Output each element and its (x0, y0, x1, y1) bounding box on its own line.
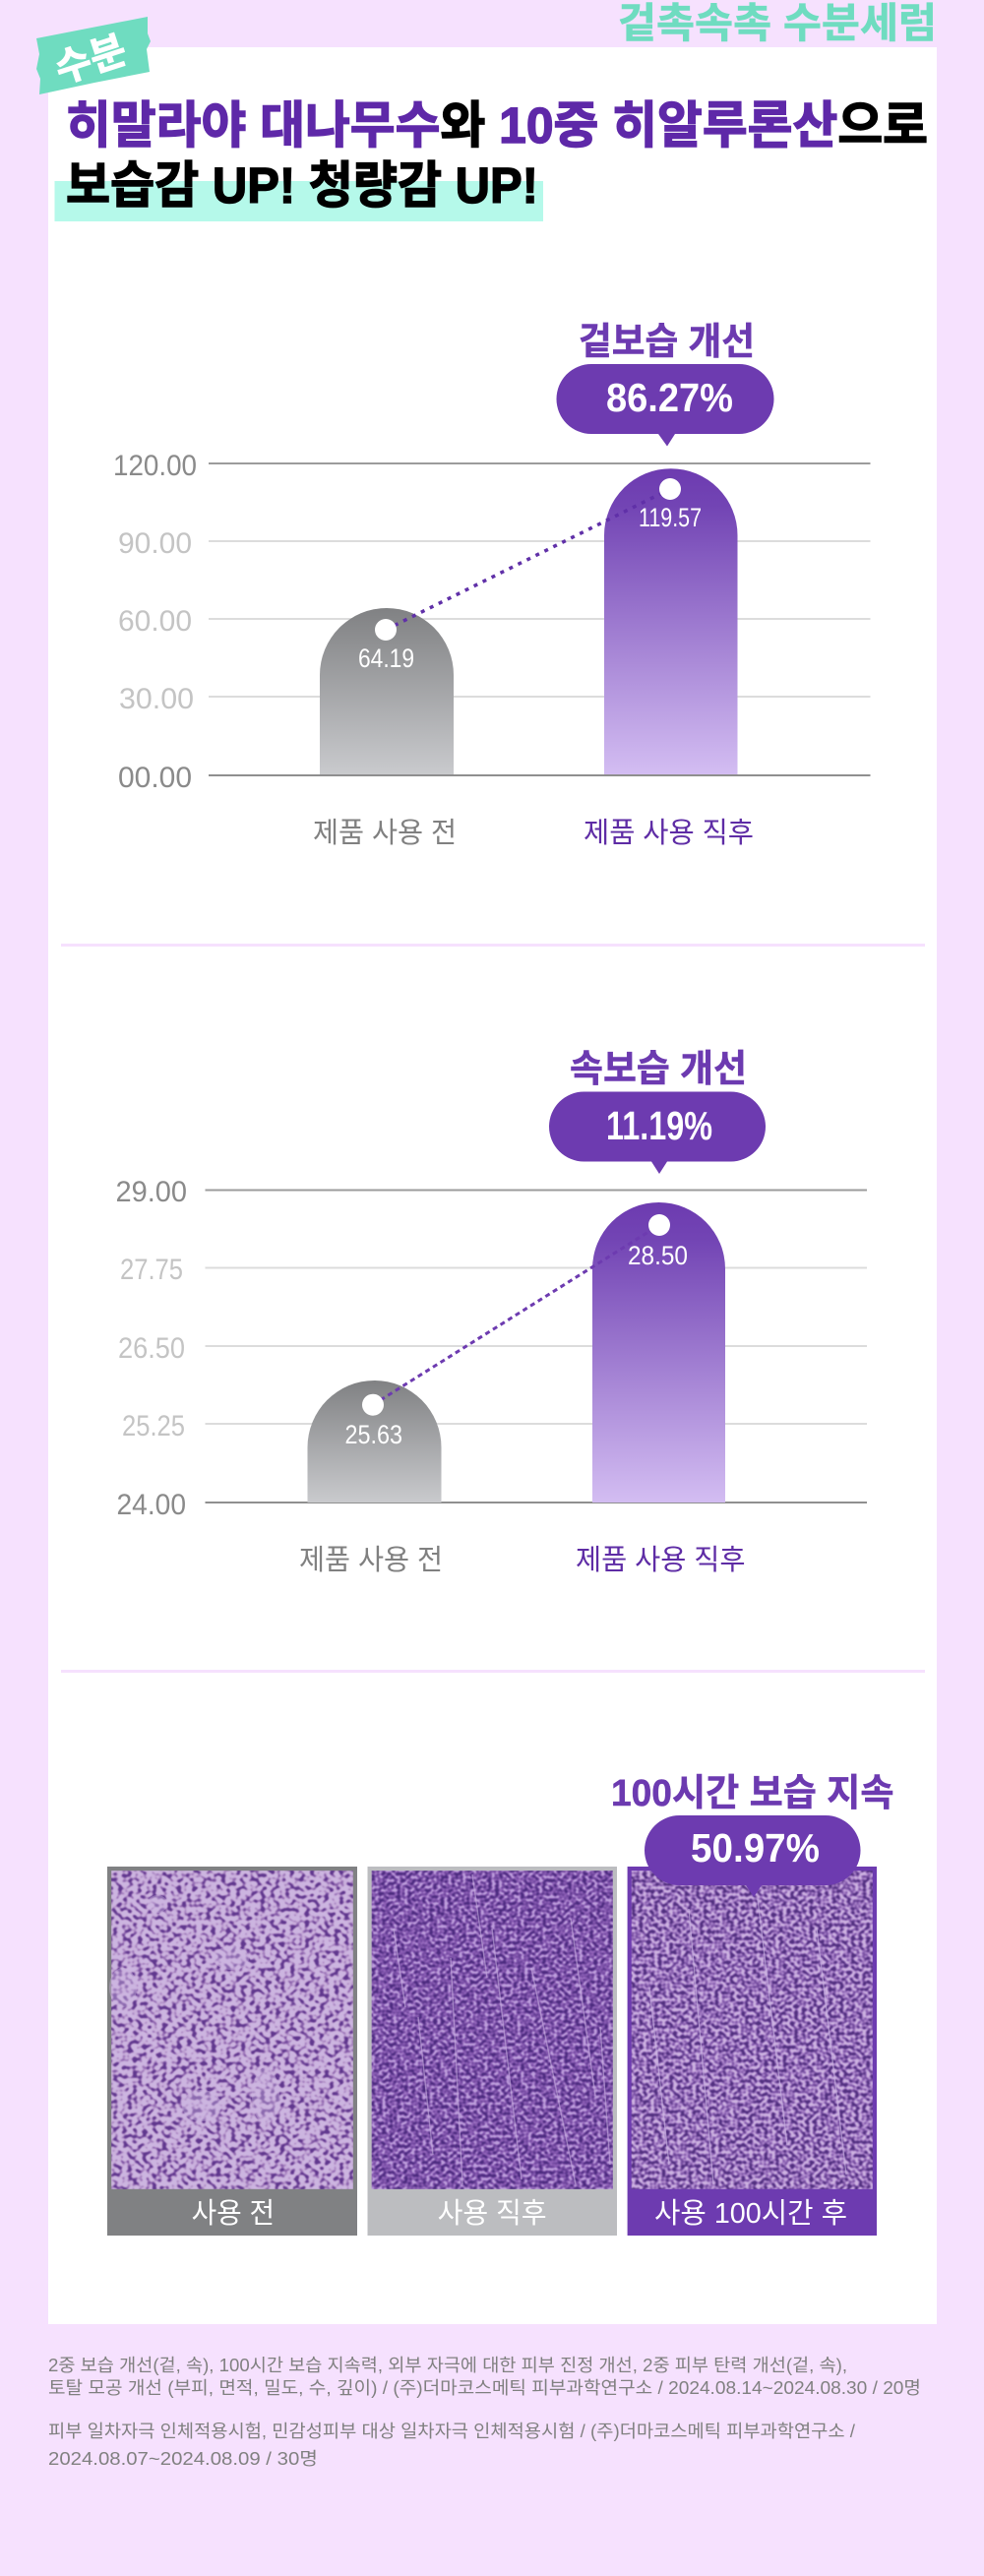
bar: after use (592, 1202, 725, 1503)
heading line 1: 히말라야 대나무수와 10중 히알루론산으로 (66, 97, 928, 153)
chart 2 y axis labels: 29.00 (116, 1176, 187, 1208)
chart 1 y axis labels: 30.00 (119, 683, 194, 715)
chart 1 point after (639, 478, 702, 532)
chart 2 y axis labels: 27.75 (120, 1254, 183, 1286)
top title: 겉촉속촉 수분세럼 (618, 0, 937, 46)
heading highlight (55, 181, 543, 221)
photo: before use (107, 1867, 357, 2236)
footnote 1 (48, 2356, 921, 2398)
photo heading: 100시간 보습 지속 (611, 1773, 893, 1814)
chart 2 category before: 제품 사용 전 (299, 1545, 443, 1576)
photo: right after use: 사용 직후 (438, 2198, 547, 2230)
footnote 2: 2024.08.07~2024.08.09 / 30명 (48, 2449, 318, 2469)
photo: 100 hours after use (628, 1867, 877, 2236)
chart 1 point after: 119.57 (639, 503, 702, 532)
chart 1 category after: 제품 사용 직후 (584, 818, 754, 849)
chart 2 heading: 속보습 개선 (570, 1049, 747, 1090)
chart 1 point before: 64.19 (358, 644, 414, 673)
chart: outer moisture improvement (113, 322, 870, 849)
white content panel (48, 47, 937, 2324)
chart 2 callout: 11.19% (606, 1103, 712, 1148)
photo callout (645, 1815, 860, 1897)
chart: inner moisture improvement (116, 1049, 867, 1576)
chart 1 category before: 제품 사용 전 (313, 818, 457, 849)
footnotes (48, 2356, 921, 2469)
chart 2 point after (628, 1214, 688, 1270)
chart 1 y axis labels (113, 450, 197, 794)
chart 1 y axis labels: 120.00 (113, 450, 197, 482)
chart 1 callout (557, 364, 773, 447)
tag: moisture (36, 17, 151, 94)
main heading (55, 97, 928, 221)
chart 2 point before (344, 1394, 402, 1449)
chart 2 y axis labels: 24.00 (116, 1489, 186, 1521)
chart 2 y axis labels: 25.25 (122, 1410, 185, 1442)
footnote 2 (48, 2422, 855, 2469)
chart 2 point before: 25.63 (344, 1420, 402, 1449)
chart 2 point after: 28.50 (628, 1241, 688, 1270)
chart 1 dotted trend line (386, 489, 670, 630)
bar: after use (604, 468, 738, 774)
chart 1 y axis labels: 90.00 (118, 527, 192, 560)
chart 2 dotted trend line (373, 1225, 659, 1405)
chart 1 callout: 86.27% (606, 375, 733, 420)
chart 1 y axis labels: 00.00 (118, 762, 192, 794)
chart 2 category after: 제품 사용 직후 (576, 1545, 746, 1576)
photo callout: 50.97% (691, 1825, 820, 1871)
photo: before use: 사용 전 (192, 2198, 275, 2230)
footnote 1: 토탈 모공 개선 (부피, 면적, 밀도, 수, 깊이) / (주)더마코스메틱 피부과학연구소 / 2024.08.14~2024.08.30 / 20명 (48, 2378, 921, 2398)
chart 1 point before (358, 619, 414, 673)
photo: 100 hours after use: 사용 100시간 후 (654, 2198, 847, 2230)
tag shape (36, 17, 151, 94)
chart 2 y axis labels (116, 1176, 187, 1521)
tag text: 수분 (50, 29, 132, 92)
bar: before use (320, 608, 454, 774)
heading line 2: 보습감 UP! 청량감 UP! (66, 157, 538, 214)
chart 1 y axis labels: 60.00 (118, 605, 192, 638)
bar: before use (307, 1380, 441, 1503)
footnote 2: 피부 일차자극 인체적용시험, 민감성피부 대상 일차자극 인체적용시험 / (주)더마코스메틱 피부과학연구소 / (48, 2422, 855, 2441)
panel: skin photo comparison (107, 1773, 893, 2236)
chart 1 heading: 겉보습 개선 (579, 322, 755, 363)
chart 2 callout (549, 1092, 766, 1174)
footnote 1: 2중 보습 개선(겉, 속), 100시간 보습 지속력, 외부 자극에 대한 피부 진정 개선, 2중 피부 탄력 개선(겉, 속), (48, 2356, 847, 2375)
photo: right after use (368, 1867, 617, 2236)
chart 2 y axis labels: 26.50 (118, 1332, 185, 1365)
